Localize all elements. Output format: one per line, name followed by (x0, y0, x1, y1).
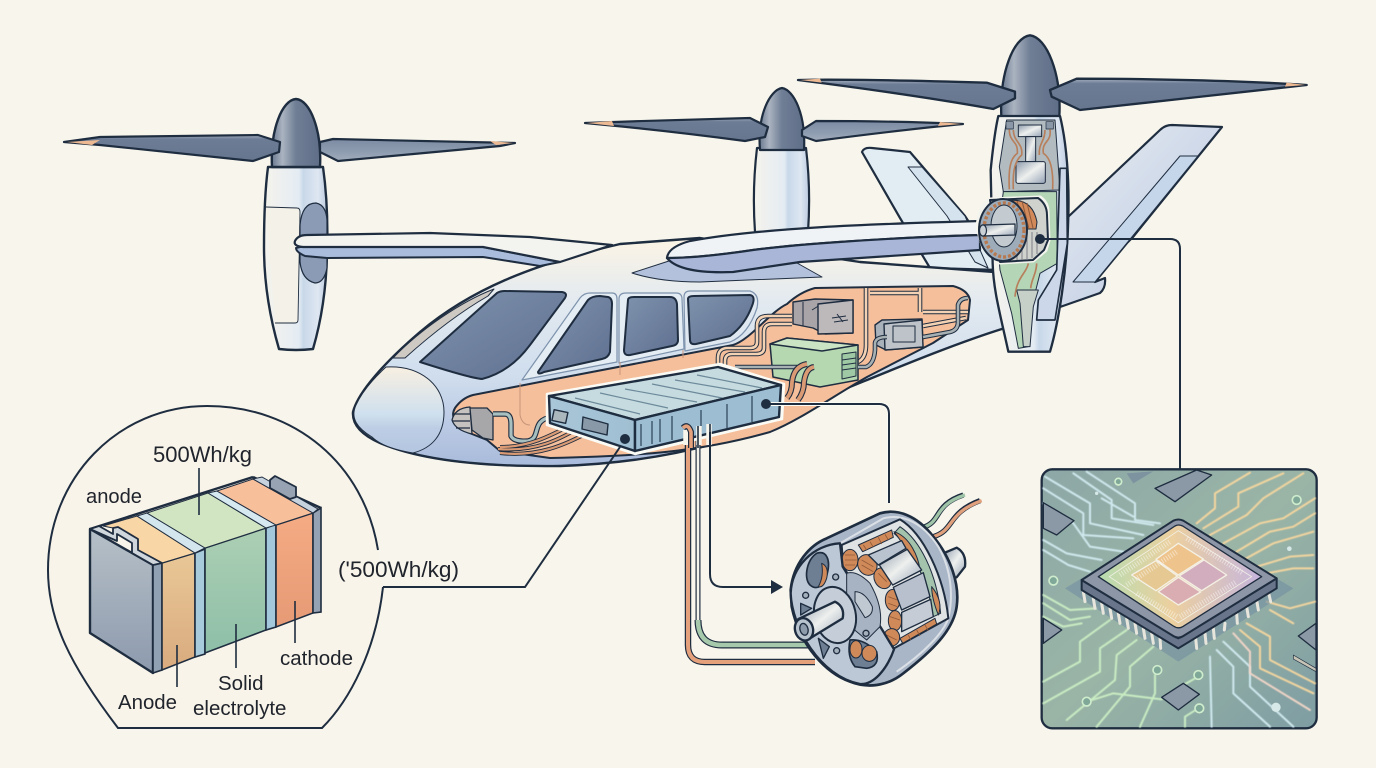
motor halo (978, 198, 1048, 262)
motor left opening (801, 603, 829, 658)
callout leader: battery to motor (761, 399, 889, 503)
motor stator (990, 198, 1048, 262)
nacelle gray lobe (300, 203, 327, 283)
pad dots (1095, 492, 1292, 712)
motor power wires (923, 495, 982, 537)
motor exposed interior (842, 519, 948, 648)
motor upper opening (807, 553, 828, 587)
nacelle shaft and housing (1006, 122, 1053, 183)
chip shadow (1065, 520, 1293, 662)
battery top face (549, 367, 781, 420)
cell rear top edge (90, 477, 321, 529)
label: energy density: 500Wh/kg (153, 442, 252, 467)
wing root fairing (632, 260, 822, 282)
gray inverter box (875, 319, 923, 350)
leader lines (177, 468, 295, 687)
middle rotor assembly (585, 88, 963, 232)
chip core blocks (1132, 543, 1227, 605)
tail fins (862, 125, 1222, 307)
motor lower opening (849, 640, 877, 668)
orange traces (1197, 473, 1315, 710)
small motor cutaway (978, 198, 1048, 262)
label: solid electrolyte: Solid (218, 672, 264, 695)
separator top (137, 513, 205, 553)
rear terminal (270, 476, 296, 499)
left rotor assembly (64, 99, 515, 350)
motor housing (791, 512, 957, 685)
small surface components (1043, 470, 1316, 710)
middle rotor nacelle (754, 148, 809, 232)
battery pack (547, 364, 784, 454)
battery connectors (552, 410, 608, 435)
left rotor spinner (272, 99, 320, 167)
cell end strip (153, 563, 162, 673)
electrolyte top (147, 493, 266, 548)
motor front plate (791, 543, 894, 684)
battery to motor copper and green cables (688, 432, 815, 662)
roof sliver (393, 289, 494, 358)
motor shaft (983, 224, 1015, 236)
front terminal rim (90, 526, 162, 565)
left wing upper surface (295, 233, 612, 262)
fuselage (353, 238, 1005, 466)
nose cone (354, 367, 444, 453)
separator top two (208, 491, 276, 528)
anode layer top (103, 516, 195, 563)
callout label: energy density: ('500Wh/kg) (338, 557, 459, 582)
side window one (538, 296, 612, 374)
motor inner plate (847, 573, 881, 640)
chip package (1082, 519, 1277, 648)
motor stator ribs (1012, 232, 1037, 260)
chip die (1098, 525, 1262, 628)
motor windings (842, 530, 940, 646)
motor hub (809, 583, 861, 647)
gray equipment box (793, 299, 853, 334)
right tilt rotor assembly (798, 35, 1307, 352)
left wing lower surface (296, 247, 560, 266)
nacelle green cutaway (997, 192, 1057, 348)
callout leader: cell inset to battery (383, 434, 630, 587)
motor copper winding (1005, 200, 1037, 229)
right nacelle shell (991, 116, 1069, 352)
solid electrolyte front (205, 528, 266, 653)
label: cathode: cathode (280, 647, 353, 670)
cutaway interior (452, 286, 970, 458)
label: anode bottom: Anode (118, 692, 177, 714)
door frame two (619, 293, 684, 363)
right wing lower surface (667, 235, 980, 272)
circuit chip panel (1042, 469, 1317, 728)
light blue traces (1043, 472, 1293, 727)
side window three (688, 295, 754, 344)
right rotor spinner (1001, 35, 1060, 117)
motor rear shaft (943, 548, 965, 578)
middle rotor blade left (585, 118, 768, 141)
electric motor illustration (791, 495, 982, 685)
arrow to motor (710, 432, 783, 594)
separator front two (266, 524, 276, 630)
door frame one (522, 293, 617, 380)
left rotor blade right (320, 139, 515, 161)
nacelle inner panel (266, 207, 300, 323)
nose equipment bay (452, 407, 493, 440)
wiring bundles (493, 298, 968, 454)
solid-state cell inset (48, 406, 383, 728)
anode layer front (162, 553, 195, 670)
panel board (1042, 469, 1317, 728)
left rotor nacelle (264, 167, 327, 350)
separator front (195, 549, 205, 657)
green power unit (770, 338, 858, 387)
motor stator teeth (868, 541, 933, 632)
right rotor blade left (798, 80, 1015, 109)
right rotor blade right (1050, 79, 1307, 110)
battery right face (635, 385, 781, 451)
middle rotor blade right (802, 121, 963, 141)
windshield (420, 291, 566, 379)
pads (1049, 478, 1301, 713)
left rotor blade left (64, 135, 280, 161)
battery left face (549, 396, 635, 451)
motor front ring (979, 199, 1027, 261)
label: solid electrolyte: electrolyte (193, 697, 286, 720)
door frame three (684, 291, 758, 351)
nacelle copper wiring (1009, 129, 1053, 297)
cell left end cap (90, 529, 153, 673)
cell right cap (313, 508, 321, 613)
right wing upper surface (667, 221, 980, 258)
label: anode top: anode (86, 486, 142, 508)
motor output shaft (792, 602, 843, 643)
motor bolts (803, 574, 869, 654)
callout leader: nacelle motor to chip (1035, 234, 1180, 470)
nacelle gray cutaway (999, 120, 1060, 192)
green traces (1043, 595, 1198, 727)
side window two (624, 297, 678, 355)
cathode layer front (276, 513, 313, 627)
battery cable stubs (683, 424, 710, 448)
door seam lines (520, 350, 683, 425)
nacelle right shell panel (1037, 168, 1067, 320)
middle rotor spinner (760, 88, 804, 150)
upper tan pipes (718, 288, 968, 372)
main wing (295, 221, 980, 282)
inset outline (48, 406, 383, 728)
chip pins (1083, 592, 1271, 648)
cathode top (217, 479, 313, 525)
